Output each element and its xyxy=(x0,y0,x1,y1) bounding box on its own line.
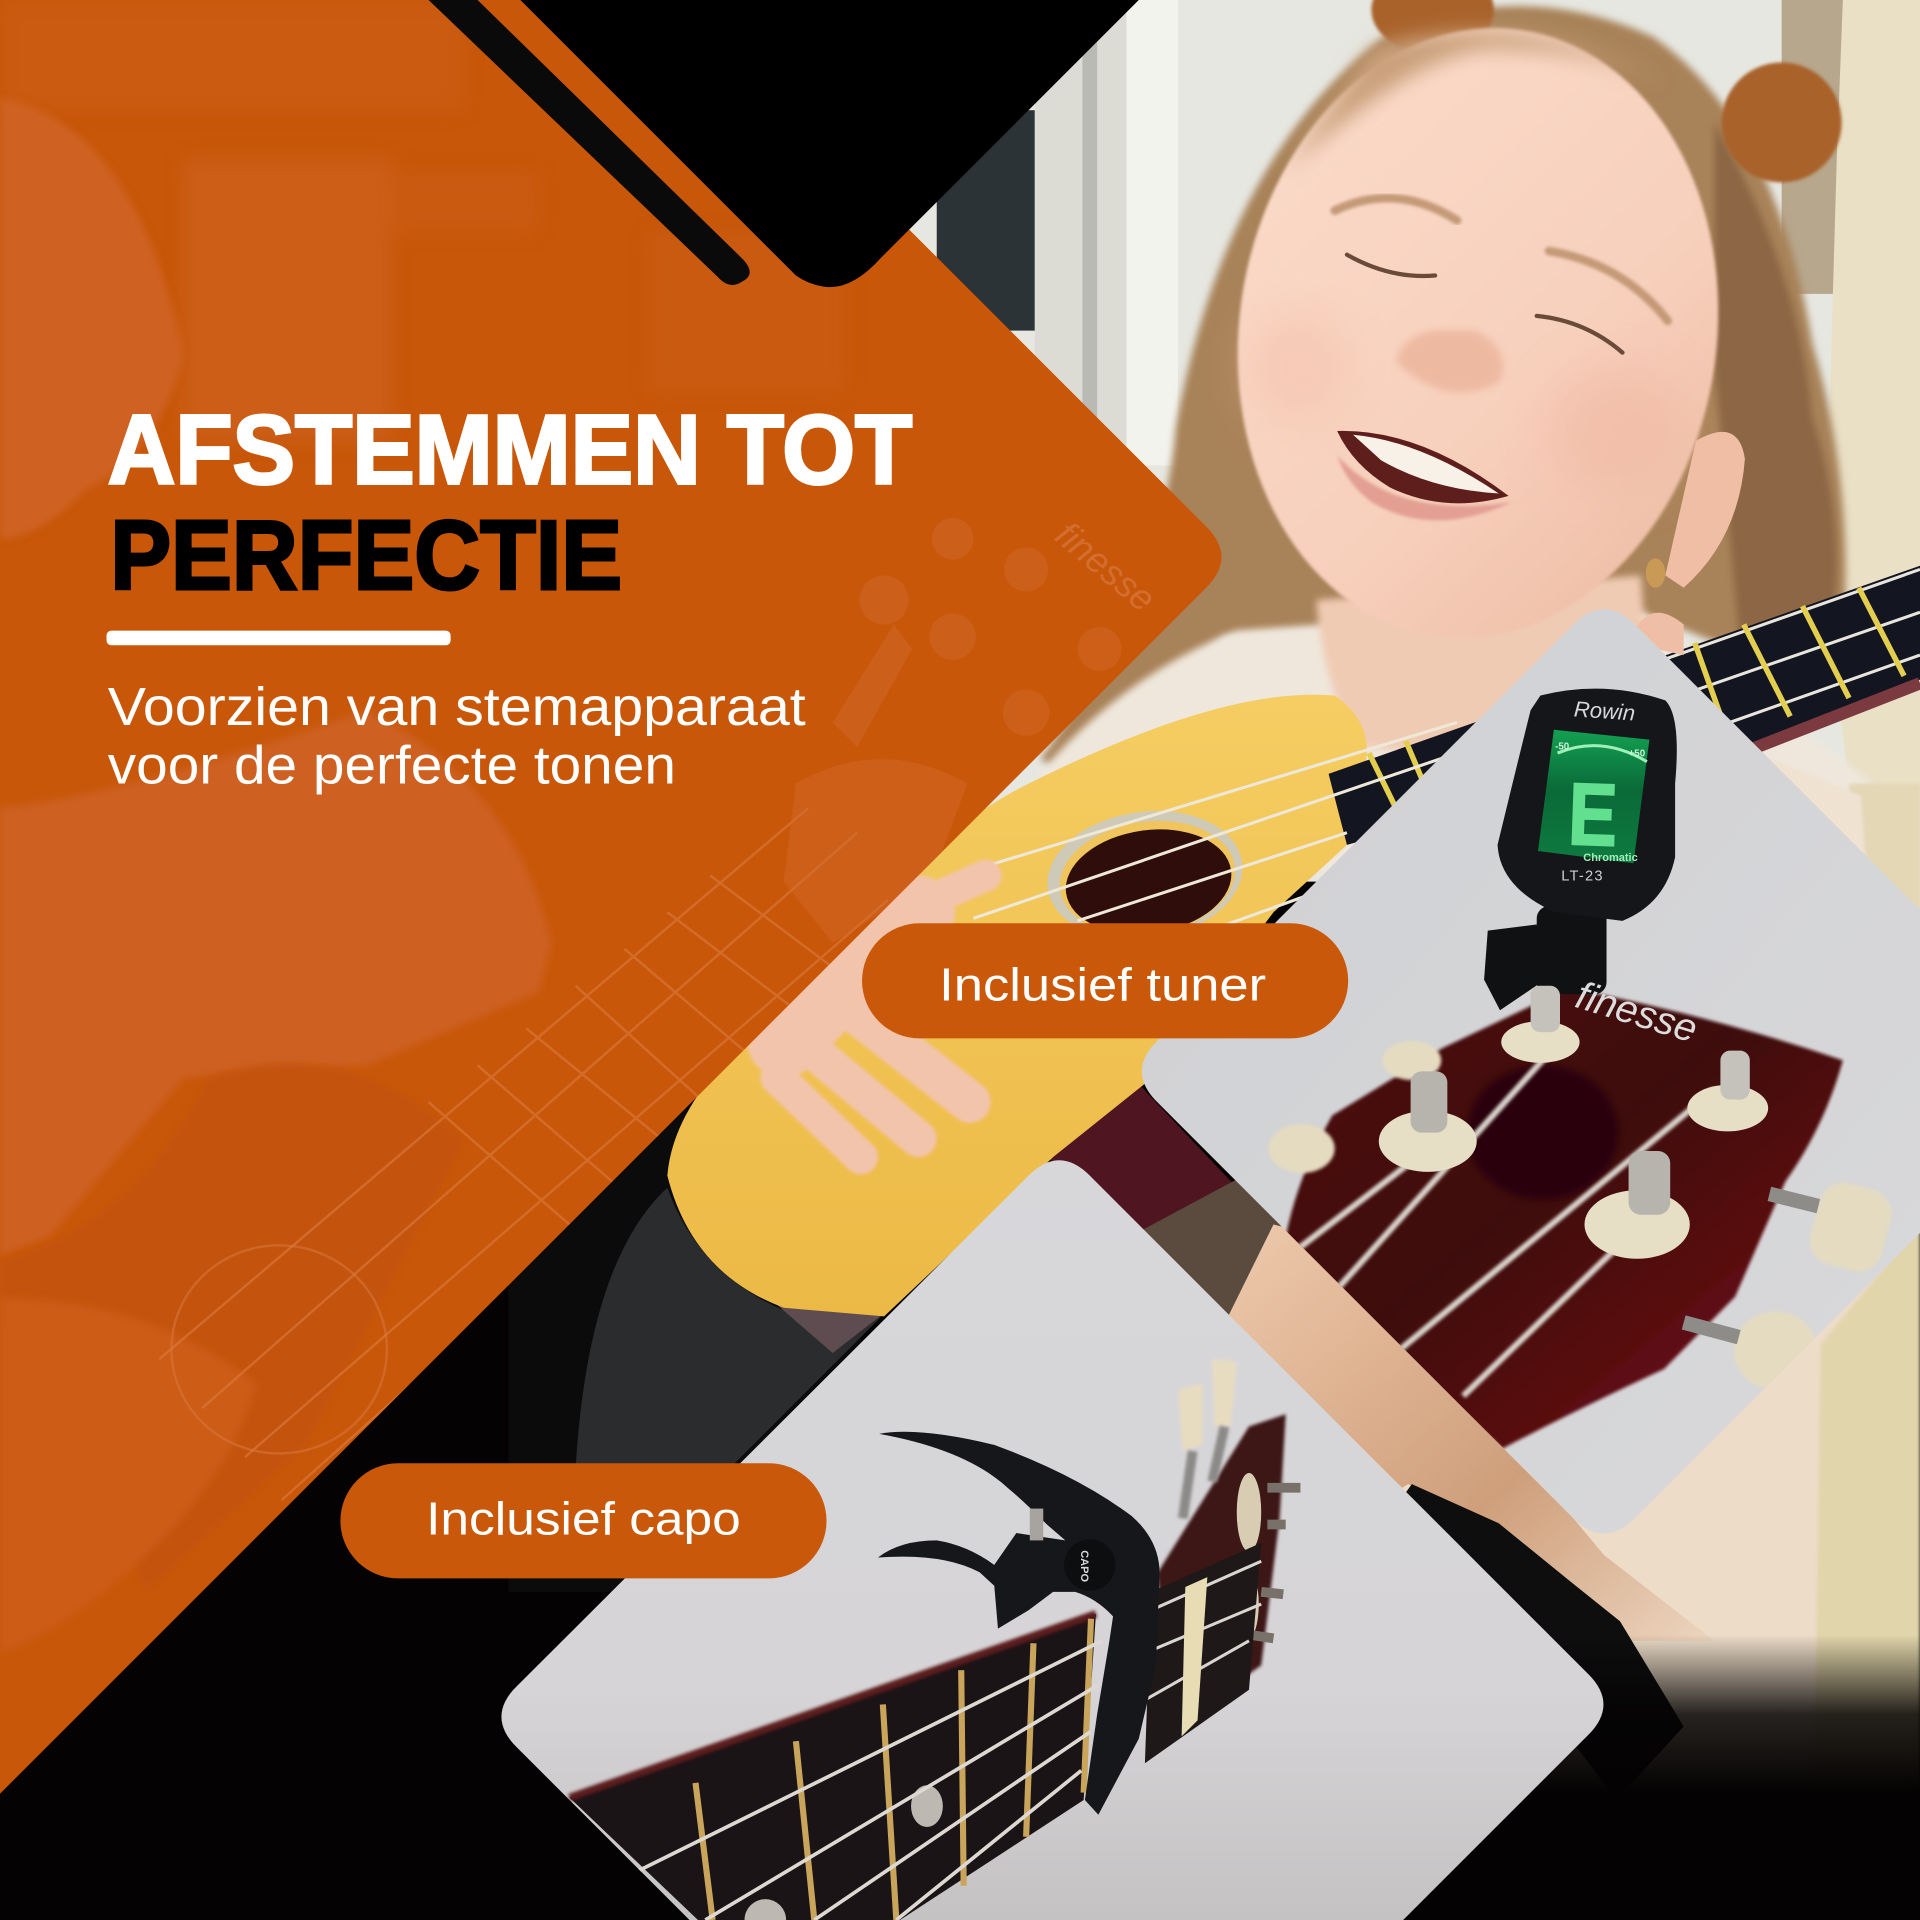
dark red guitar side xyxy=(1047,1078,1243,1231)
subheading line 2: voor de perfecte tonen xyxy=(108,736,676,796)
faded ukulele body xyxy=(210,1062,338,1077)
bottom black fill xyxy=(906,1793,1920,1920)
faded ukulele sound ring xyxy=(171,1245,387,1453)
pill: Inclusief capo xyxy=(340,1463,827,1578)
faded headstock with finesse mark xyxy=(784,518,1122,943)
faded brand text: finesse xyxy=(1048,513,1163,620)
eyebrows xyxy=(1335,198,1457,220)
tuner device xyxy=(1498,689,1677,921)
photo: girl playing ukulele xyxy=(508,0,1920,1920)
pill label: Inclusief capo xyxy=(426,1492,741,1544)
faded background blocks xyxy=(187,162,398,438)
finesse logo: finesse xyxy=(1571,974,1702,1051)
tuner device: +50 xyxy=(1629,749,1646,760)
heading xyxy=(108,395,912,610)
far headstock xyxy=(1157,1359,1300,1727)
orange diagonal panel xyxy=(0,0,1221,1794)
nut xyxy=(1182,1577,1207,1736)
headstock reflection xyxy=(1467,1065,1619,1200)
hair xyxy=(1041,6,1846,784)
forehead hair shadow xyxy=(1286,31,1665,171)
knob shafts xyxy=(1684,1194,1818,1337)
heading line 1: AFSTEMMEN TOT xyxy=(108,395,912,505)
black lower area behind the guitar xyxy=(508,1108,980,1592)
tuner note letter: E xyxy=(1567,764,1619,865)
headstock xyxy=(1286,988,1843,1449)
panel: capo photo xyxy=(486,1145,1619,1920)
closed eyes xyxy=(1347,255,1435,276)
tuner screen xyxy=(1538,730,1649,863)
dark trousers xyxy=(576,1188,882,1476)
heading line 2: PERFECTIE xyxy=(110,500,622,610)
curtain xyxy=(1824,0,1920,1224)
capo clamp xyxy=(878,1432,1160,1815)
tuner model: LT-23 xyxy=(1561,868,1604,884)
black diagonal stripe xyxy=(429,0,750,285)
black top triangle xyxy=(520,0,1139,287)
panel: tuner photo xyxy=(1127,594,1920,1549)
strings xyxy=(638,1641,1102,1920)
bottom fade to black xyxy=(906,1635,1920,1794)
ukulele fretboard xyxy=(1329,566,1920,845)
faded neck with strings and frets xyxy=(159,808,906,1500)
frets xyxy=(696,1619,1091,1920)
window and wall background xyxy=(906,0,1920,882)
faded hand xyxy=(0,1298,257,1653)
tuner labels: -50 xyxy=(1555,741,1570,752)
pill: Inclusief tuner xyxy=(862,923,1348,1038)
fret marker dots xyxy=(744,1785,943,1920)
subheading xyxy=(108,677,806,796)
black lower left wedge xyxy=(0,1286,508,1920)
ear xyxy=(1665,432,1745,588)
hair pompoms xyxy=(1371,0,1842,182)
subheading line 1: Voorzien van stemapparaat xyxy=(108,677,806,737)
tuner device: Chromatic xyxy=(1583,852,1638,864)
soundhole xyxy=(1039,799,1251,952)
capo spring screw xyxy=(1030,1509,1043,1540)
brown hair behind arm xyxy=(1141,1178,1288,1316)
hand on neck xyxy=(1629,613,1684,655)
face xyxy=(1199,0,1757,669)
panel: faded photo overlay xyxy=(0,0,1163,1653)
capo badge xyxy=(1064,1539,1116,1591)
guitar back and knee xyxy=(778,1305,888,1353)
ukulele strings xyxy=(955,722,1457,943)
pill label: Inclusief tuner xyxy=(939,958,1266,1010)
mouth xyxy=(1337,431,1509,503)
arm xyxy=(1228,1224,1714,1641)
tuner scale xyxy=(1558,746,1647,762)
fretboard xyxy=(569,1614,1096,1920)
neck beyond capo xyxy=(1145,1543,1261,1763)
tuner brand: Rowin xyxy=(1573,696,1636,726)
cheek blush xyxy=(1549,367,1684,490)
ukulele body xyxy=(667,695,1367,1316)
tuning pegs xyxy=(1379,986,1768,1259)
shirt and chest xyxy=(1029,576,1873,931)
faded lace sleeve xyxy=(0,710,551,1255)
strings on headstock xyxy=(1298,1053,1714,1396)
black sleeve xyxy=(1396,1484,1684,1800)
tuning knobs xyxy=(1269,1041,1897,1390)
earring xyxy=(1646,558,1665,588)
tuner clip and stem xyxy=(1484,906,1607,1010)
faded face xyxy=(0,98,184,539)
lower right cream fabric xyxy=(1347,753,1920,1920)
underline bar xyxy=(107,631,451,645)
capo label: CAPO xyxy=(1078,1550,1090,1582)
hand xyxy=(778,876,986,1157)
nose xyxy=(1396,331,1503,392)
